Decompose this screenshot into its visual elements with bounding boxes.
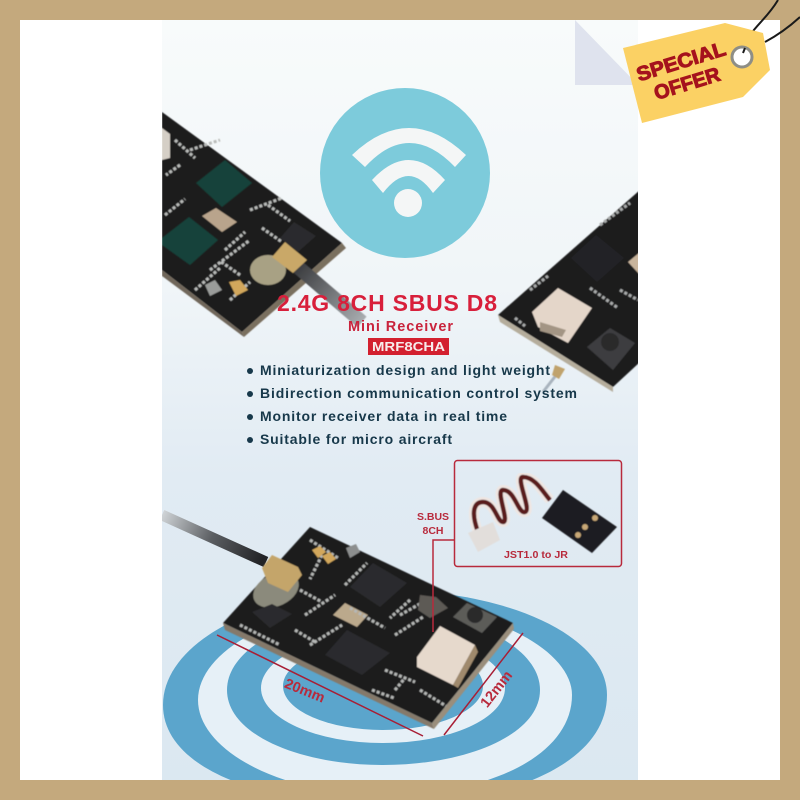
antenna cable xyxy=(162,515,266,562)
icon: special offer tag: SPECIAL xyxy=(634,38,728,86)
chips xyxy=(350,563,407,607)
dimension: 20mm xyxy=(217,635,423,736)
label: S.BUS 8CH: S.BUS xyxy=(417,511,449,523)
crystal xyxy=(333,603,368,627)
icon: special offer tag xyxy=(623,0,800,123)
label: S.BUS 8CH: 8CH xyxy=(422,525,444,537)
silkscreen xyxy=(240,540,446,706)
dimension: 12mm xyxy=(444,633,523,735)
RF shield blob and gold connector xyxy=(252,577,300,608)
model badge: MRF8CHA xyxy=(372,339,446,354)
leader line: S.BUS connector xyxy=(433,540,454,632)
label: S.BUS 8CH xyxy=(417,513,449,534)
feature list: Monitor receiver data in real time xyxy=(260,408,507,424)
panel: product sheet xyxy=(162,20,640,800)
dimension: 20mm: 20mm xyxy=(282,676,327,707)
model badge xyxy=(368,338,449,355)
tact button xyxy=(453,603,497,633)
feature list: Suitable for micro aircraft xyxy=(260,431,452,447)
icon: special offer tag: OFFER xyxy=(652,64,724,105)
icon: wifi badge xyxy=(320,88,490,258)
dimension: 12mm: 12mm xyxy=(478,668,516,711)
connector label: JST1.0 to JR xyxy=(504,549,568,561)
tag strings xyxy=(745,0,778,48)
subtitle: Mini Receiver xyxy=(348,319,453,335)
servo cable xyxy=(468,477,617,553)
white JST socket xyxy=(417,626,475,685)
antenna cable xyxy=(292,262,362,322)
feature list xyxy=(247,362,577,447)
feature list: Miniaturization design and light weight xyxy=(260,362,550,378)
photo: top-right receiver board xyxy=(498,190,640,392)
JST plug xyxy=(468,522,500,552)
feature list: Bidirection communication control system xyxy=(260,385,577,401)
photo: top-left receiver board xyxy=(162,112,362,337)
JR plug xyxy=(542,490,617,553)
title: 2.4G 8CH SBUS D8 xyxy=(277,290,497,316)
folded page corner xyxy=(575,20,638,85)
callout: connector box xyxy=(454,460,622,566)
photo: main receiver board xyxy=(223,527,514,729)
mini antenna plug xyxy=(543,374,557,392)
concentric signal rings xyxy=(163,594,607,780)
